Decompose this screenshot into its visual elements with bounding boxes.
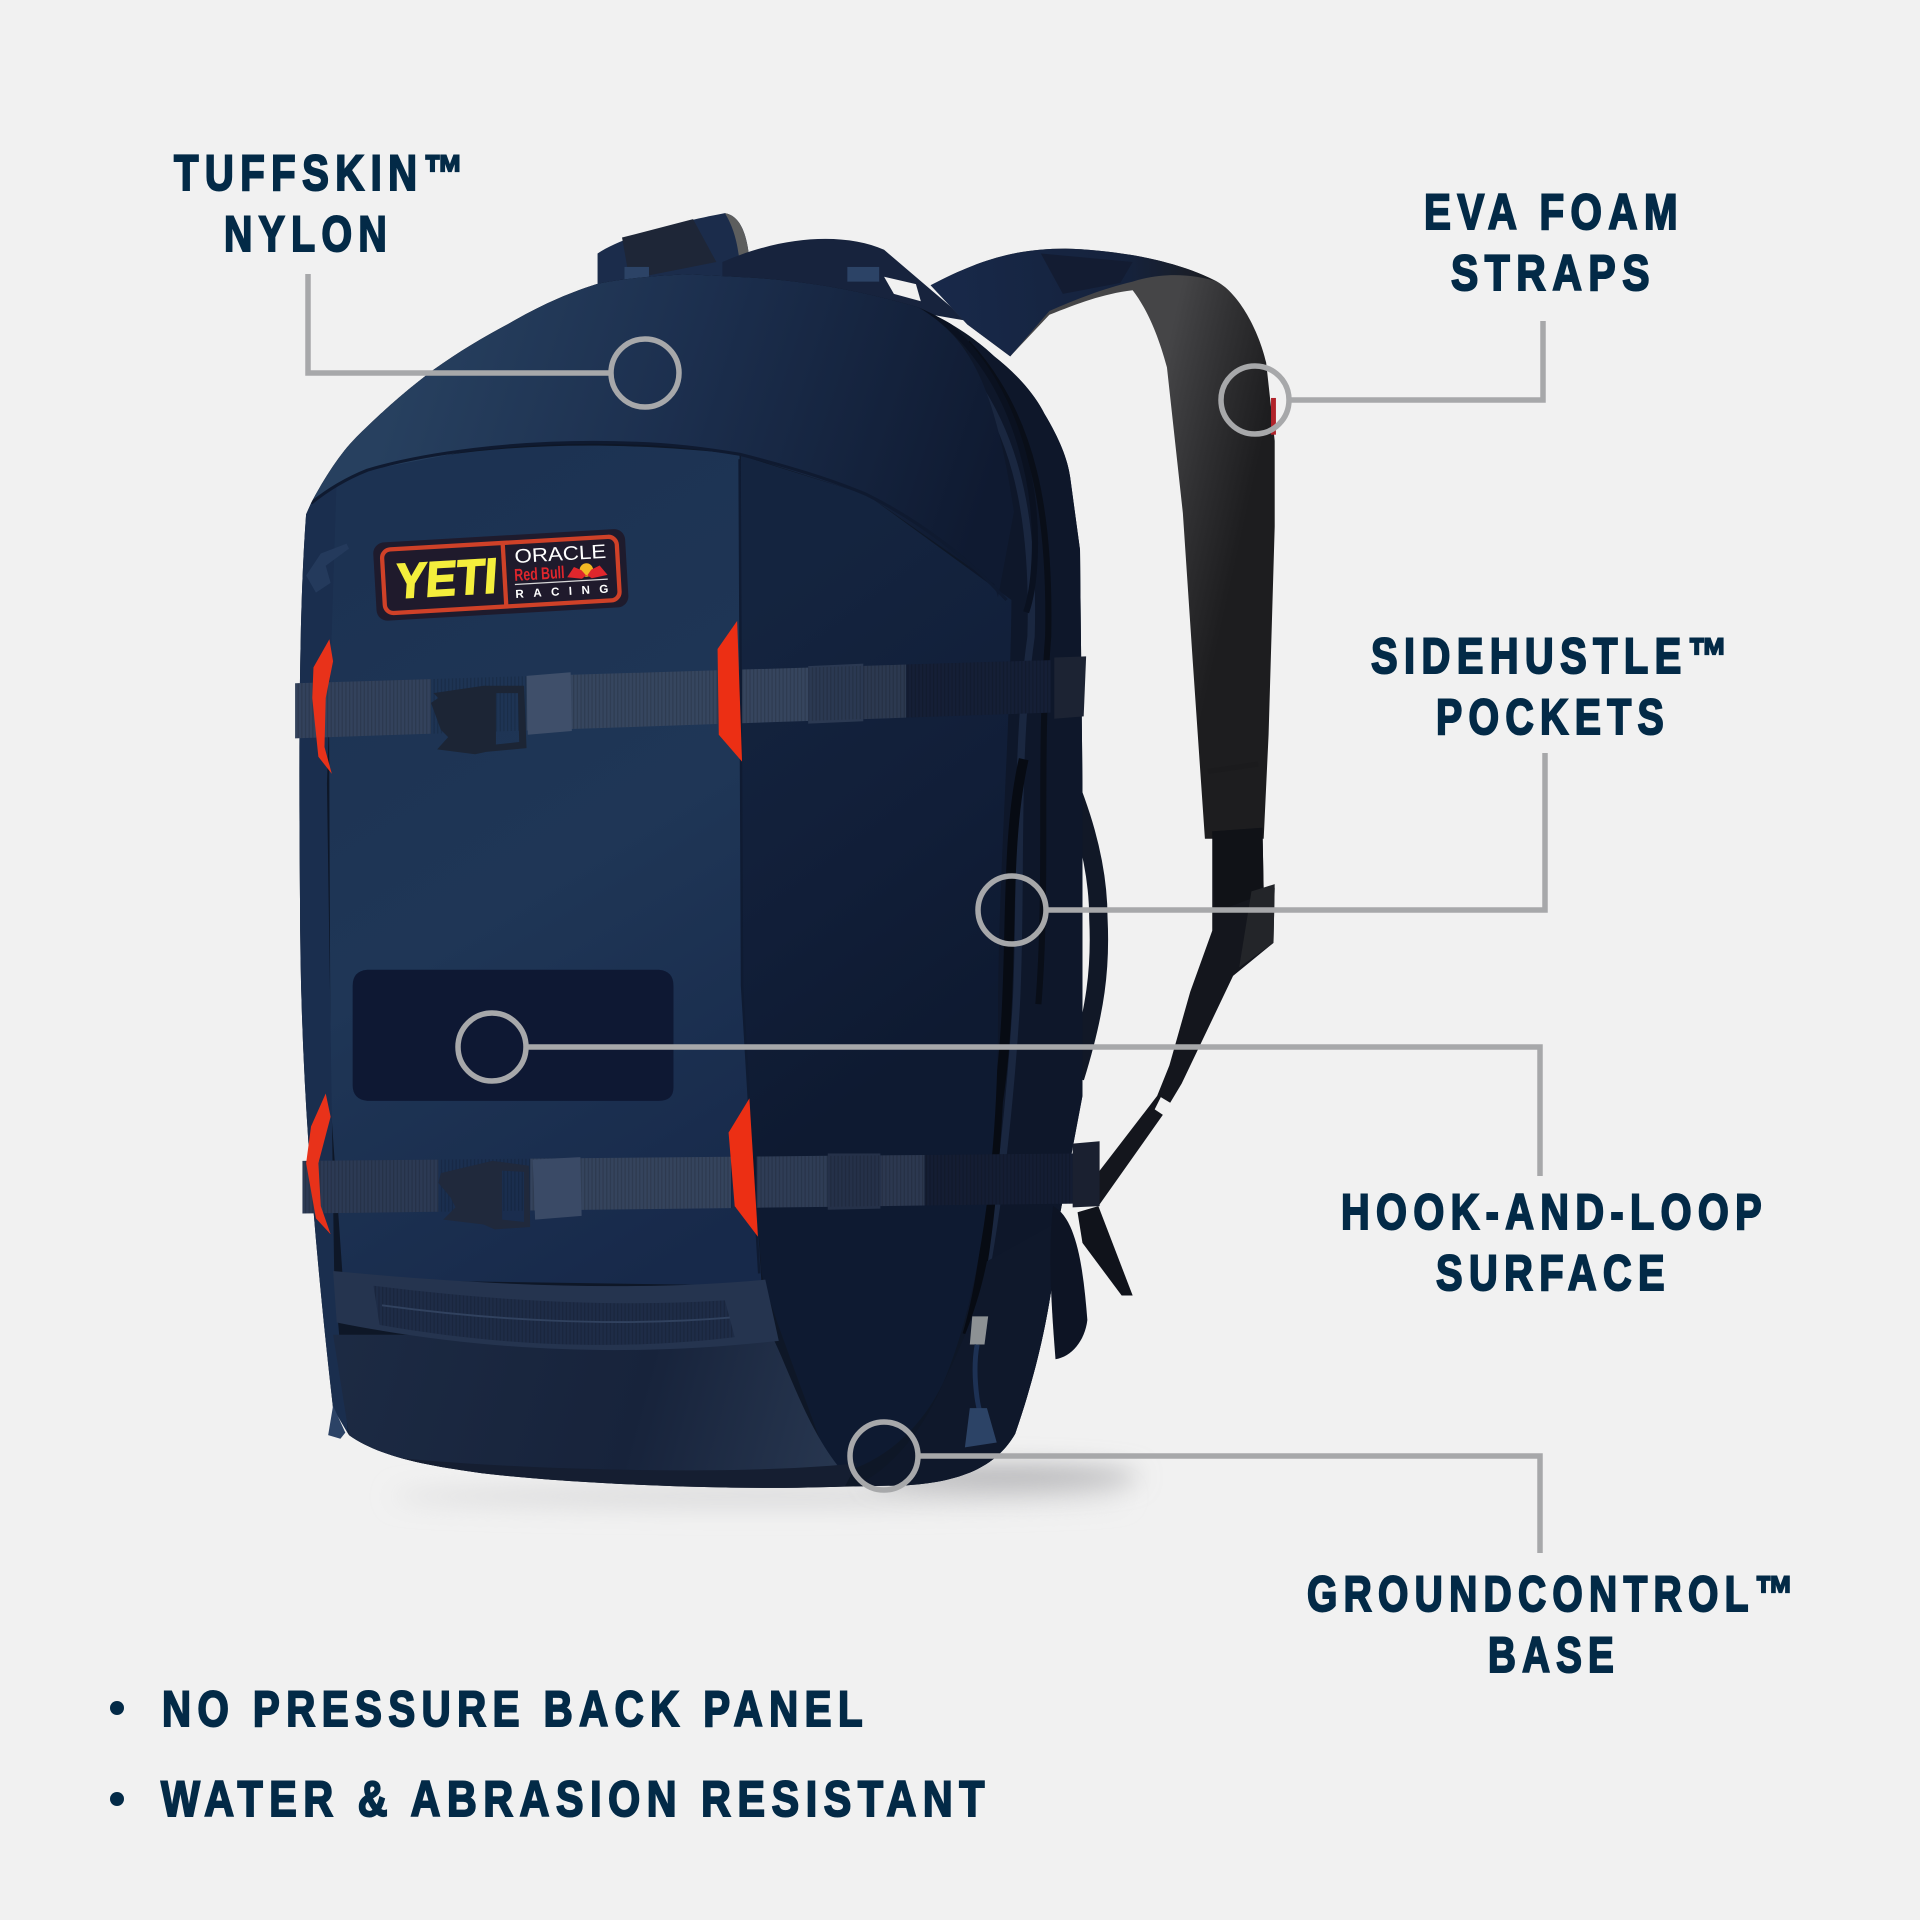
- marker ring: [611, 339, 679, 407]
- top carry handle: [598, 213, 749, 288]
- center seam: [740, 459, 759, 1273]
- base rim: [401, 1458, 852, 1488]
- lower strap end clip: [1073, 1141, 1100, 1207]
- marker ring: [458, 1013, 526, 1081]
- label: EVA FOAM: [1424, 184, 1684, 240]
- leader line: [918, 1456, 1540, 1553]
- upper strap end clip: [1054, 656, 1086, 719]
- red loop: upper center: [718, 621, 742, 762]
- zipper pull: [965, 1316, 997, 1447]
- lower base: [333, 1335, 845, 1482]
- bullet item: water and abrasion resistant: WATER & ABRASION RESISTANT: [161, 1771, 991, 1827]
- lower corner panel: [854, 1258, 1051, 1486]
- logo wordmark: Red Bull: Red Bull: [514, 562, 565, 585]
- label: [1307, 1566, 1800, 1683]
- label: POCKETS: [1436, 689, 1670, 745]
- label: HOOK-AND-LOOP: [1341, 1184, 1768, 1240]
- logo bull mark: [566, 562, 608, 580]
- backpack illustration: [294, 213, 1276, 1506]
- label: BASE: [1488, 1627, 1620, 1683]
- label: SIDEHUSTLE™: [1371, 628, 1734, 684]
- callout: EVA foam straps: [1221, 184, 1684, 434]
- shoulder strap with foam pad: [931, 249, 1276, 839]
- label: [1424, 184, 1684, 301]
- red loop: lower left: [306, 1093, 331, 1234]
- top flap: [300, 274, 1014, 598]
- lower buckle: [438, 1161, 530, 1229]
- side compression handle: [1060, 762, 1099, 1078]
- label: GROUNDCONTROL™: [1307, 1566, 1800, 1622]
- callout: hook-and-loop surface: [458, 1013, 1768, 1301]
- red loop: upper left: [312, 639, 333, 774]
- ground shadow: [392, 1466, 1139, 1506]
- bullet item: no pressure back panel: NO PRESSURE BACK PANEL: [162, 1681, 869, 1737]
- leader line: [1046, 753, 1545, 910]
- velcro patch: [353, 970, 673, 1101]
- leader line: [308, 274, 611, 373]
- side gusset with zipper: [962, 341, 1082, 1474]
- callout: SideHustle pockets: [978, 628, 1734, 944]
- bullet list: [110, 1681, 991, 1827]
- left front panel: [328, 446, 762, 1286]
- leader line: [1289, 321, 1543, 400]
- leader line: [526, 1047, 1540, 1176]
- flap seam: [311, 442, 1007, 600]
- panels clipped to body: [294, 274, 1090, 1494]
- zip track along flap: [924, 310, 1038, 614]
- side clip tab: [1050, 1206, 1087, 1359]
- logo patch: [373, 529, 629, 621]
- infographic canvas: [110, 154, 1790, 1818]
- label: TUFFSKIN™: [174, 145, 470, 201]
- label: STRAPS: [1451, 245, 1656, 301]
- callout: GroundControl base: [850, 1422, 1800, 1683]
- lower shoulder webbing and buckle: [1078, 828, 1275, 1296]
- label: [1371, 628, 1734, 745]
- logo wordmark: YETI: YETI: [394, 548, 499, 609]
- label: [174, 145, 470, 262]
- bottom corner pull: [328, 1406, 345, 1439]
- callout: TUFFSKIN nylon: [174, 145, 679, 407]
- marker ring: [978, 876, 1046, 944]
- main body silhouette: [299, 274, 1082, 1488]
- logo wordmark: ORACLE: ORACLE: [514, 541, 607, 568]
- label: SURFACE: [1436, 1245, 1671, 1301]
- left side pull: [306, 544, 349, 593]
- right front panel: [741, 456, 1011, 1476]
- left side edge: [299, 492, 348, 1434]
- upper compression strap: [295, 660, 1051, 738]
- lower compression strap: [302, 1153, 1075, 1220]
- marker ring: [850, 1422, 918, 1490]
- zipper cover loop: [624, 239, 967, 321]
- red loop: lower center: [729, 1098, 758, 1237]
- logo wordmark: RACING: RACING: [515, 583, 609, 601]
- label: NYLON: [224, 206, 393, 262]
- label: [1341, 1184, 1768, 1301]
- marker ring: [1221, 366, 1289, 434]
- bottom webbing handle: [333, 1271, 779, 1350]
- upper buckle: [431, 686, 527, 754]
